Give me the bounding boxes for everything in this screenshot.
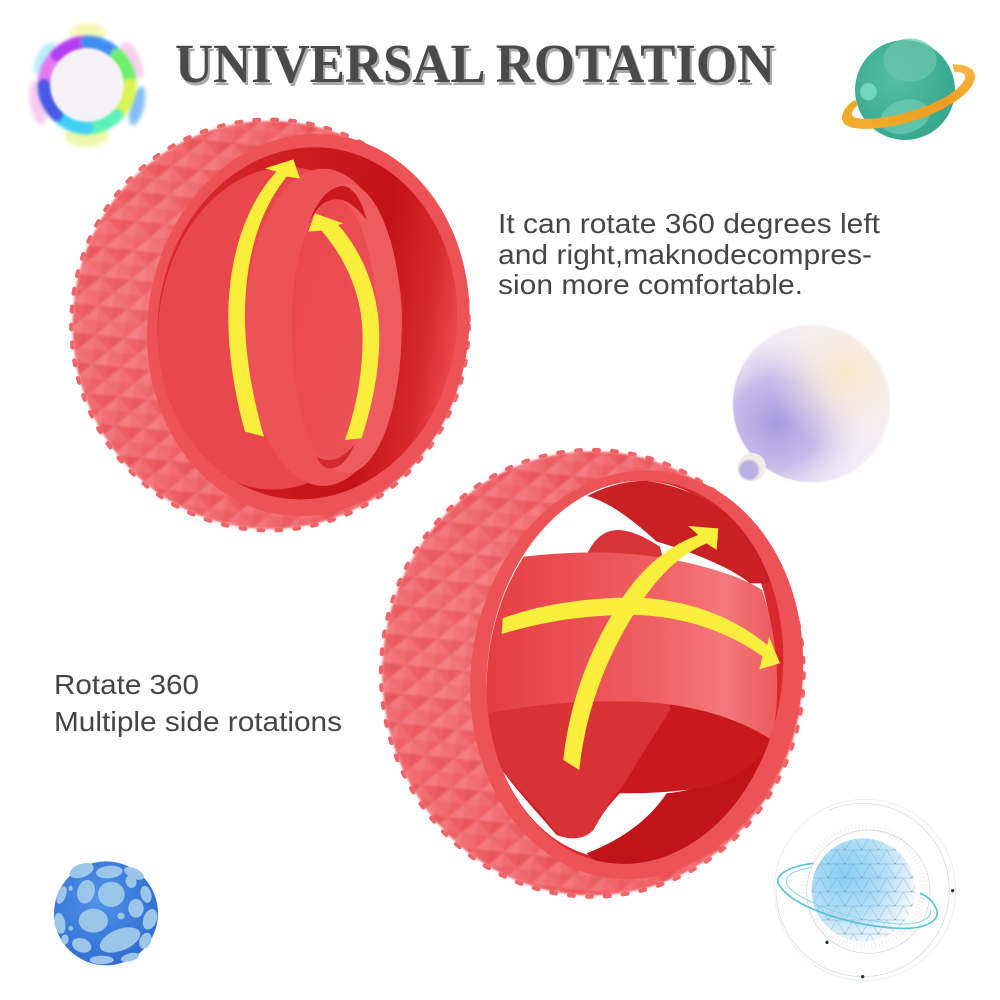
product: top red ball xyxy=(71,113,494,537)
arrow: outer yellow curve xyxy=(228,159,300,437)
icon: green planet with ring xyxy=(842,38,975,140)
title: UNIVERSAL ROTATION xyxy=(175,33,775,94)
inner cavity with rotating band xyxy=(158,147,457,500)
icon: lilac bubble sphere xyxy=(732,325,890,483)
text: multiple side rotations: Rotate 360 xyxy=(54,669,199,700)
lower band face xyxy=(470,687,670,838)
lower dark band xyxy=(470,687,775,838)
back ring lower xyxy=(586,740,770,864)
arrow: inner yellow curve xyxy=(308,213,379,440)
product: bottom red ball xyxy=(381,449,829,901)
main front band xyxy=(474,553,777,740)
textured ball body xyxy=(381,450,804,897)
text: multiple side rotations: Multiple side rotations xyxy=(54,706,342,737)
textured ball body xyxy=(71,120,469,530)
inner wall strip xyxy=(462,461,808,883)
text: rotate left and right: sion more comfortable. xyxy=(498,269,803,300)
text: multiple side rotations xyxy=(54,669,342,737)
text: rotate left and right: It can rotate 360 degrees left xyxy=(498,208,880,239)
back ring upper xyxy=(587,480,771,584)
icon: rainbow wave ring xyxy=(26,23,149,147)
icon: blue cratered ball xyxy=(53,860,160,965)
arrow: horizontal yellow curve xyxy=(502,597,780,669)
text: rotate left and right: and right,maknodecompres- xyxy=(498,239,872,270)
arrow: rising yellow curve xyxy=(563,526,718,770)
outer rim xyxy=(444,449,829,901)
title: UNIVERSAL ROTATION xyxy=(177,36,777,97)
small inner ball xyxy=(588,530,662,558)
text: rotate left and right xyxy=(498,208,880,300)
inner rotating rings xyxy=(486,480,778,864)
outer rim xyxy=(123,113,494,537)
open centre xyxy=(463,462,796,878)
icon: wireframe globe with rings xyxy=(774,799,956,981)
